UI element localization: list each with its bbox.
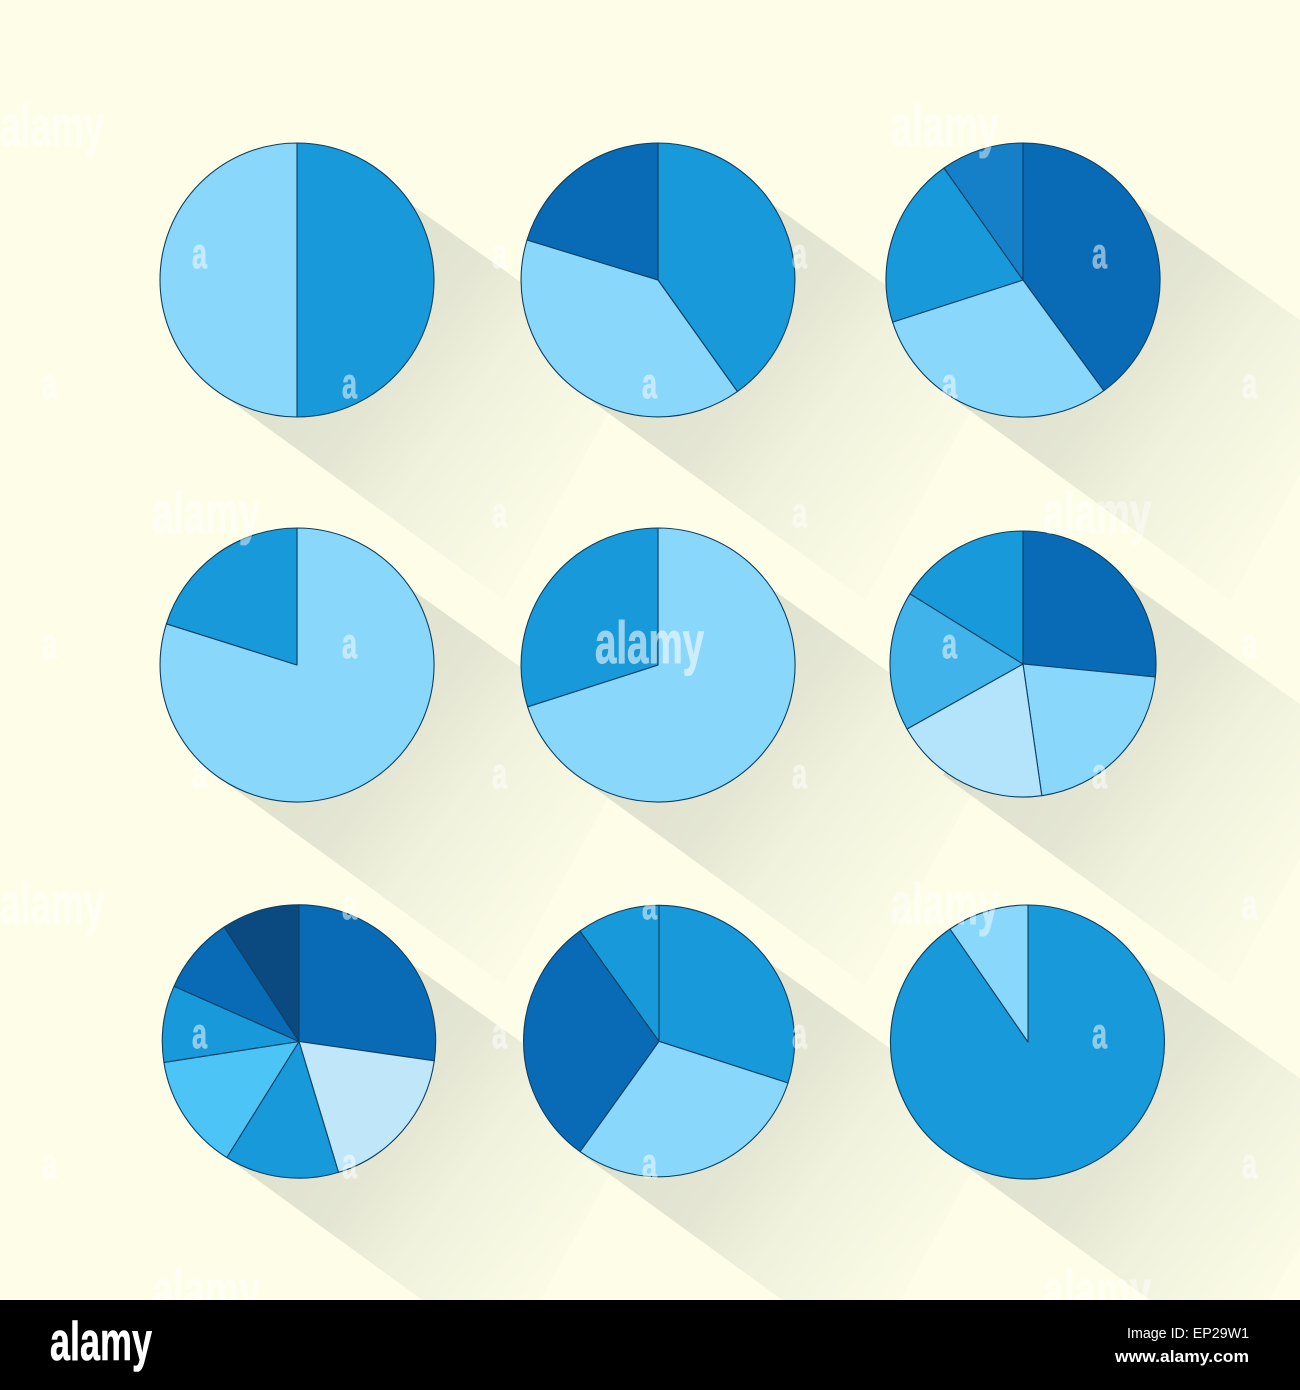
watermark: alamy words: alamy (1043, 1259, 1151, 1324)
watermark: small letters: a (342, 881, 358, 929)
watermark: small letters: a (1242, 881, 1258, 929)
pie chart: row 2, 70/30 slices (521, 528, 795, 802)
watermark: alamy words: alamy (891, 94, 999, 159)
watermark: small letters: a (42, 1140, 58, 1188)
watermark: small letters: a (492, 1010, 508, 1058)
watermark: small letters: a (642, 360, 658, 408)
watermark: small letters: a (1092, 230, 1108, 278)
watermark: small letters: a (42, 620, 58, 668)
watermark: small letters: a (1092, 1010, 1108, 1058)
watermark: small letters: a (42, 360, 58, 408)
watermark: small letters: a (492, 230, 508, 278)
footer website: www.alamy.com (1114, 1347, 1249, 1366)
pie chart: row 1, two slices (160, 143, 434, 417)
watermark: alamy words: alamy (0, 94, 104, 159)
watermark: small letters: a (1242, 620, 1258, 668)
watermark: small letters: a (342, 620, 358, 668)
watermark: small letters: a (342, 1140, 358, 1188)
watermark: small letters: a (492, 750, 508, 798)
pie chart: row 3, 90/10 slices (890, 905, 1164, 1179)
pie chart: row 3, seven slices (162, 905, 436, 1178)
watermark: small letters: a (192, 750, 208, 798)
footer image id: Image ID: EP29W1 (1127, 1325, 1249, 1342)
watermark: small letters: a (492, 489, 508, 537)
pie chart: row 2, five slices (890, 531, 1156, 797)
long shadows (217, 180, 1300, 1362)
pie chart: row 3, four slices (524, 905, 795, 1177)
watermark: small letters (42, 230, 1258, 1188)
watermark: small letters: a (792, 489, 808, 537)
pie chart: row 1, four slices (886, 143, 1160, 417)
watermark: small letters: a (792, 750, 808, 798)
watermark: small letters: a (1092, 750, 1108, 798)
pie chart: row 1, three slices (521, 143, 795, 417)
watermark: alamy words: alamy (891, 872, 999, 937)
footer bar (0, 1300, 1300, 1390)
watermark: alamy words (0, 94, 1151, 1324)
watermark: centre alamy: alamy (595, 610, 704, 676)
watermark: small letters: a (792, 230, 808, 278)
watermark: small letters: a (342, 360, 358, 408)
watermark: small letters: a (942, 360, 958, 408)
watermark: small letters: a (1242, 1140, 1258, 1188)
pie chart: row 2, 80/20 slices (160, 528, 434, 802)
watermark: small letters: a (642, 881, 658, 929)
footer logo: alamy (50, 1310, 152, 1372)
watermark: alamy words: alamy (1043, 481, 1151, 546)
watermark: alamy words: alamy (152, 481, 260, 546)
watermark: alamy words: alamy (0, 872, 104, 937)
watermark: small letters: a (1242, 360, 1258, 408)
watermark: small letters: a (942, 620, 958, 668)
watermark: small letters: a (642, 1140, 658, 1188)
watermark: small letters: a (792, 1010, 808, 1058)
watermark: alamy words: alamy (152, 1259, 260, 1324)
watermark: small letters: a (192, 1010, 208, 1058)
watermark: small letters: a (192, 230, 208, 278)
